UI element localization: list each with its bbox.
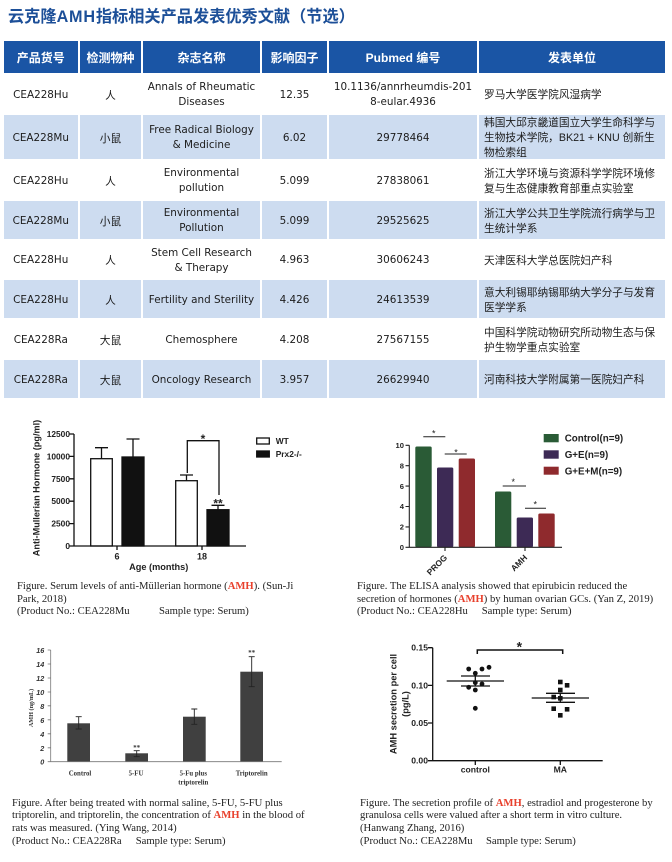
caption: figure 3: rats was measured. (Ying Wang, 2014): [12, 823, 177, 834]
chart: serum AMH by age bar chart: Anti-Mullerian Hormone (pg/ml): [32, 420, 42, 556]
chart: AMH concentration treatment bar chart: Control: [69, 770, 91, 778]
chart: ELISA PROG and AMH bar chart: Control(n=9): [565, 434, 623, 444]
chart: ELISA PROG and AMH bar chart: 4: [400, 502, 405, 511]
chart: AMH secretion scatter plot: *: [517, 639, 523, 655]
table header row: 检测物种: [86, 50, 134, 64]
chart: ELISA PROG and AMH bar chart: G+E+M(n=9): [565, 466, 622, 478]
table row 7: [14, 326, 655, 354]
table row 5: & Therapy: [174, 262, 229, 274]
chart: serum AMH by age bar chart: 12500: [47, 429, 70, 439]
chart: AMH secretion scatter plot: AMH secretion per cell: [388, 654, 398, 754]
table row 7: CEA228Ra: [14, 334, 68, 346]
chart: serum AMH by age bar chart: Prx2-/-: [276, 449, 302, 459]
caption: figure 4: Sample type: Serum): [486, 836, 576, 847]
chart: AMH concentration treatment bar chart: 6: [40, 716, 45, 725]
table row 4: 29525625: [377, 214, 429, 226]
table row 7: 护生物学重点实验室: [484, 342, 580, 354]
table row 3: Environmental: [164, 167, 239, 179]
table row 5: [13, 246, 612, 274]
caption: figure 4: Figure. The secretion profile of AMH, estradiol and progesterone by: [360, 798, 653, 808]
table header row: 发表单位: [548, 50, 596, 64]
table row 7: 4.208: [280, 334, 309, 346]
table row 3: [13, 167, 655, 194]
chart: serum AMH by age bar chart: 6: [114, 552, 120, 562]
table row 8: 河南科技大学附属第一医院妇产科: [484, 374, 644, 386]
table row 7: Chemosphere: [165, 334, 238, 346]
chart: ELISA PROG and AMH bar chart: 6: [400, 482, 404, 491]
chart: ELISA PROG and AMH bar chart: AMH: [509, 553, 529, 573]
table row 1: 8-eular.4936: [370, 96, 436, 108]
table row 1: 人: [105, 88, 116, 102]
table row 6: 人: [105, 292, 116, 308]
chart: AMH concentration treatment bar chart: 5-Fu plus: [180, 770, 207, 778]
chart: serum AMH by age bar chart: 0: [65, 541, 70, 551]
chart: ELISA PROG and AMH bar chart: PROG: [425, 553, 449, 577]
table row 8: [4, 360, 665, 398]
table row 7: 大鼠: [100, 332, 121, 348]
caption: figure 2: Sample type: Serum): [482, 606, 572, 617]
caption: figure 1: Park, 2018): [17, 594, 67, 605]
caption: figure 4: (Product No.: CEA228Mu: [360, 836, 473, 847]
chart: AMH concentration treatment bar chart: 14: [36, 660, 44, 669]
chart: ELISA PROG and AMH bar chart: *: [432, 429, 436, 439]
table row 1: CEA228Hu: [13, 88, 68, 100]
table row 8: CEA228Ra: [14, 374, 68, 386]
table header row: Pubmed 编号: [366, 50, 440, 64]
chart: AMH concentration treatment bar chart: 2: [39, 744, 44, 753]
table row 2: 小鼠: [100, 130, 121, 146]
chart: AMH concentration treatment bar chart: 12: [36, 674, 44, 683]
table row 2: Free Radical Biology: [149, 124, 254, 136]
chart: AMH concentration treatment bar chart: 10: [36, 688, 44, 697]
chart: AMH concentration treatment bar chart: **: [248, 650, 256, 657]
table row 2: 生物技术学院，BK21 + KNU 创新生: [484, 132, 655, 144]
table row 3: CEA228Hu: [13, 174, 68, 186]
table row 2: & Medicine: [173, 139, 230, 151]
table header row: 影响因子: [270, 50, 318, 64]
table row 5: 4.963: [280, 254, 309, 266]
table row 4: Pollution: [179, 222, 224, 234]
table row 2: 29778464: [377, 132, 429, 144]
caption: figure 1: [17, 581, 294, 617]
chart: AMH concentration treatment bar chart: 16: [36, 646, 45, 655]
table row 3: 复与生态健康教育部重点实验室: [484, 182, 634, 194]
chart: AMH secretion scatter plot: 0.00: [411, 756, 428, 766]
table header row: [4, 41, 665, 73]
chart: serum AMH by age bar chart: 5000: [51, 496, 70, 506]
chart: AMH concentration treatment bar chart: 8: [40, 702, 44, 711]
table row 4: 小鼠: [100, 214, 121, 228]
chart: AMH secretion scatter plot: (pg/L): [400, 691, 410, 717]
chart: AMH secretion scatter plot: 0.10: [411, 680, 428, 690]
chart: AMH concentration treatment bar chart: 4: [39, 730, 44, 739]
chart: AMH concentration treatment bar chart: 0: [40, 758, 44, 767]
table row 6: 4.426: [280, 294, 309, 306]
title: 云克隆AMH指标相关产品发表优秀文献（节选）: [8, 8, 355, 26]
chart: AMH concentration treatment bar chart: Triptorelin: [236, 770, 268, 778]
chart: AMH concentration treatment bar chart: **: [133, 745, 141, 752]
table row 3: pollution: [179, 182, 224, 194]
chart: ELISA PROG and AMH bar chart: *: [512, 477, 516, 487]
table row 5: 天津医科大学总医院妇产科: [484, 254, 612, 266]
table row 2: 6.02: [283, 132, 306, 144]
chart: ELISA PROG and AMH bar chart: *: [454, 448, 458, 458]
caption: figure 3: Sample type: Serum): [136, 836, 226, 847]
table row 8: 3.957: [280, 374, 309, 386]
table row 1: Diseases: [178, 96, 225, 108]
caption: figure 2: secretion of hormones (AMH) by human ovarian GCs. (Yan Z, 2019): [357, 594, 653, 605]
table row 4: 5.099: [280, 214, 309, 226]
table: product literature: [4, 41, 665, 398]
chart: AMH concentration treatment bar chart: AMH (ng/mL): [28, 689, 35, 727]
table row 4: 生统计学系: [484, 222, 537, 234]
table row 6: Fertility and Sterility: [149, 294, 254, 306]
chart: serum AMH by age bar chart: 18: [197, 552, 207, 562]
table row 3: 5.099: [280, 174, 309, 186]
table row 4: 浙江大学公共卫生学院流行病学与卫: [484, 208, 655, 220]
table row 5: Stem Cell Research: [151, 246, 252, 258]
table row 4: CEA228Mu: [13, 214, 69, 226]
caption: figure 4: (Hanwang Zhang, 2016): [360, 823, 464, 834]
chart: serum AMH by age bar chart: WT: [276, 436, 290, 446]
chart: AMH secretion scatter plot: 0.05: [411, 718, 428, 728]
table row 2: 物检索组: [484, 147, 527, 159]
caption: figure 3: triptorelin, and triptorelin, the concentration of AMH in the blood of: [12, 810, 305, 821]
chart: ELISA PROG and AMH bar chart: 2: [400, 523, 404, 532]
table row 6: CEA228Hu: [13, 294, 68, 306]
table header row: 杂志名称: [177, 50, 226, 64]
caption: figure 3: (Product No.: CEA228Ra: [12, 836, 122, 847]
caption: figure 1: Sample type: Serum): [159, 606, 249, 617]
caption: figure 3: Figure. After being treated with normal saline, 5-FU, 5-FU plus: [12, 798, 283, 808]
table row 1: 12.35: [280, 88, 309, 100]
table header row: 产品货号: [17, 50, 65, 64]
chart: serum AMH by age bar chart: 10000: [47, 451, 70, 461]
chart: serum AMH by age bar chart: **: [213, 497, 223, 511]
table row 7: 27567155: [377, 334, 429, 346]
chart: ELISA PROG and AMH bar chart: 0: [400, 543, 404, 552]
chart: ELISA PROG and AMH bar chart: 10: [396, 441, 404, 450]
table row 8: 26629940: [377, 374, 429, 386]
table row 3: 27838061: [377, 174, 429, 186]
table row 8: Oncology Research: [152, 374, 251, 386]
table row 6: 医学学系: [484, 302, 527, 314]
table row 6: 意大利锡耶纳锡耶纳大学分子与发育: [484, 286, 655, 298]
table row 1: [13, 81, 602, 108]
table row 4: [4, 201, 665, 239]
table row 3: 浙江大学环境与资源科学学院环境修: [484, 168, 655, 180]
caption: figure 4: [360, 798, 653, 847]
table row 5: 人: [105, 253, 116, 268]
table row 1: 罗马大学医学院风湿病学: [484, 89, 602, 101]
table row 2: [4, 115, 665, 159]
chart: AMH concentration treatment bar chart: triptorelin: [178, 780, 209, 786]
chart: ELISA PROG and AMH bar chart: *: [534, 500, 538, 510]
caption: figure 2: (Product No.: CEA228Hu: [357, 606, 468, 617]
table row 5: 30606243: [377, 254, 429, 266]
chart: serum AMH by age bar chart: Age (months): [129, 562, 188, 572]
caption: figure 2: [357, 581, 653, 617]
table row 4: Environmental: [164, 207, 239, 219]
chart: serum AMH by age bar chart: 2500: [51, 519, 70, 529]
caption: figure 1: (Product No.: CEA228Mu: [17, 606, 130, 617]
chart: AMH concentration treatment bar chart: 5-FU: [129, 770, 143, 778]
table row 5: CEA228Hu: [13, 254, 68, 266]
chart: AMH secretion scatter plot: MA: [554, 764, 567, 774]
chart: AMH secretion scatter plot: 0.15: [411, 643, 428, 653]
chart: serum AMH by age bar chart: 7500: [51, 474, 70, 484]
chart: serum AMH by age bar chart: *: [201, 432, 206, 446]
caption: figure 1: Figure. Serum levels of anti-Müllerian hormone (AMH). (Sun-Ji: [17, 581, 293, 592]
chart: ELISA PROG and AMH bar chart: G+E(n=9): [565, 450, 608, 461]
chart: ELISA PROG and AMH bar chart: 8: [400, 461, 404, 470]
caption: figure 4: granulosa cells were valued after a short term in vitro culture.: [360, 810, 622, 821]
table row 1: 10.1136/annrheumdis-201: [334, 81, 472, 93]
chart: AMH secretion scatter plot: control: [461, 764, 490, 774]
caption: figure 3: [12, 798, 305, 847]
table row 3: 人: [105, 174, 116, 188]
table row 2: 韩国大邱京畿道国立大学生命科学与: [484, 117, 655, 129]
table row 1: Annals of Rheumatic: [148, 81, 255, 93]
table row 8: 大鼠: [100, 372, 121, 388]
table row 7: 中国科学院动物研究所动物生态与保: [484, 326, 655, 338]
table row 6: 24613539: [377, 294, 429, 306]
table row 6: [4, 280, 665, 318]
table row 2: CEA228Mu: [13, 132, 69, 144]
caption: figure 2: Figure. The ELISA analysis showed that epirubicin reduced the: [357, 581, 627, 592]
